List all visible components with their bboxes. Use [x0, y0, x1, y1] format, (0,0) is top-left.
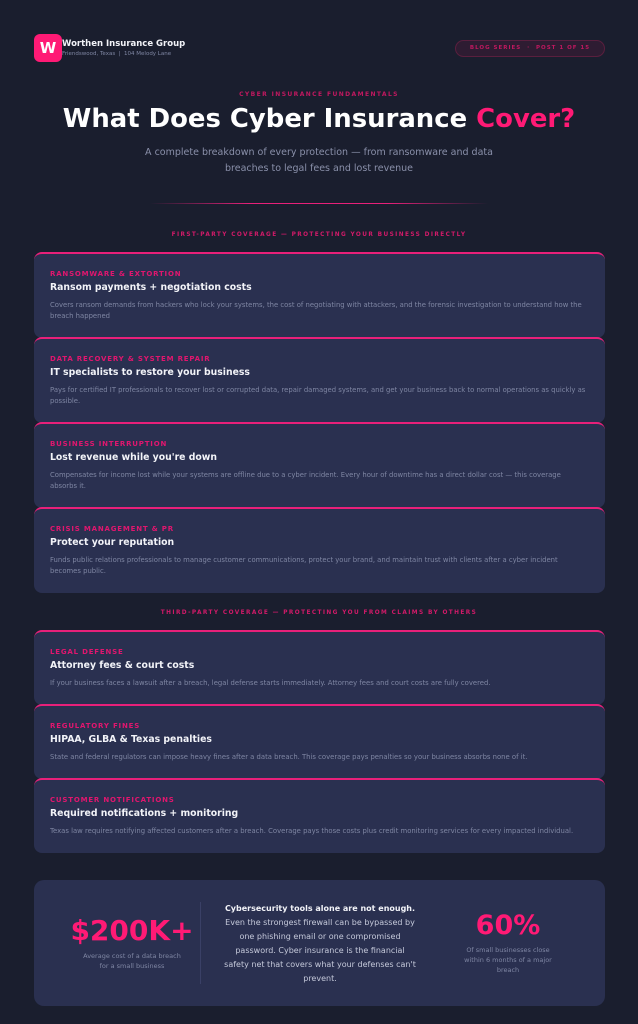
stat: 60%: Of small businesses close within 6 months of a major breach [464, 946, 552, 974]
card: data recovery: IT specialists to restore your business [50, 367, 250, 378]
card: crisis management: Funds public relations professionals to manage customer communications, protect your brand, and maintain trust with clients after a cyber incident becomes public. [50, 556, 558, 575]
card: ransomware: RANSOMWARE & EXTORTION [50, 270, 181, 278]
logo: W [40, 39, 56, 57]
title: What Does Cyber Insurance Cover? [63, 104, 575, 134]
logo [34, 34, 62, 62]
card: customer notifications: Texas law requires notifying affected customers after a breach. Coverage pays those costs plus credit monitoring services for every impacted individual. [50, 827, 573, 835]
card: regulatory fines: REGULATORY FINES [50, 722, 140, 730]
card: crisis management: Protect your reputation [50, 537, 174, 548]
card: crisis management [34, 507, 605, 593]
company name: Worthen Insurance Group [62, 39, 185, 49]
card: data recovery: Pays for certified IT professionals to recover lost or corrupted data, repair damaged systems, and get your business back to normal operations as quickly as possible. [50, 386, 585, 405]
stat: 200K: for a small business [100, 962, 164, 970]
card: regulatory fines [34, 704, 605, 779]
card: legal defense [34, 630, 605, 705]
message: Cybersecurity tools alone are not enough. [225, 904, 415, 913]
card: customer notifications [34, 778, 605, 853]
company name [62, 39, 185, 57]
card: ransomware [34, 252, 605, 338]
kicker: CYBER INSURANCE FUNDAMENTALS [239, 91, 399, 98]
card: data recovery [34, 337, 605, 423]
card: business interruption: Lost revenue while you're down [50, 452, 217, 463]
badge: BLOG SERIES · POST 1 OF 15 [470, 45, 590, 51]
message: Even the strongest firewall can be bypassed by one phishing email or one compromised password. Cyber insurance is the financial safety net that covers what your defenses can't prevent. [224, 918, 416, 983]
card: business interruption: Compensates for income lost while your systems are offline due to a cyber incident. Every hour of downtime has a direct dollar cost — this coverage absorbs it. [50, 471, 561, 490]
card: data recovery: DATA RECOVERY & SYSTEM REPAIR [50, 355, 210, 363]
section header: first-party: FIRST-PARTY COVERAGE — PROTECTING YOUR BUSINESS DIRECTLY [172, 232, 466, 238]
stat: 200K: Average cost of a data breach [83, 952, 181, 960]
stat: 200K [70, 914, 194, 970]
stat: 60%: 60% [476, 910, 540, 941]
stat: 60% [464, 910, 552, 974]
card: business interruption: BUSINESS INTERRUPTION [50, 440, 167, 448]
card: ransomware: Covers ransom demands from hackers who lock your systems, the cost of negotiating with attackers, and the forensic investigation to understand how the breach happened [50, 301, 582, 320]
card: regulatory fines: HIPAA, GLBA & Texas penalties [50, 734, 212, 745]
card: business interruption [34, 422, 605, 508]
company name: Friendswood, Texas | 104 Melody Lane [62, 51, 171, 57]
card: ransomware: Ransom payments + negotiation costs [50, 282, 252, 293]
card: customer notifications: CUSTOMER NOTIFICATIONS [50, 796, 175, 804]
card: legal defense: Attorney fees & court costs [50, 660, 194, 671]
card: legal defense: If your business faces a lawsuit after a breach, legal defense starts immediately. Attorney fees and court costs are fully covered. [50, 679, 491, 687]
badge [455, 40, 605, 57]
subtitle: A complete breakdown of every protection — from ransomware and data breaches to legal fees and lost revenue [145, 147, 493, 174]
card: customer notifications: Required notifications + monitoring [50, 808, 238, 819]
stat: 200K: $200K+ [70, 914, 194, 947]
card: legal defense: LEGAL DEFENSE [50, 648, 124, 656]
bottom panel [34, 880, 605, 1006]
card: regulatory fines: State and federal regulators can impose heavy fines after a data breach. This coverage pays penalties so your business absorbs none of it. [50, 753, 527, 761]
card: crisis management: CRISIS MANAGEMENT & PR [50, 525, 174, 533]
section header: third-party: THIRD-PARTY COVERAGE — PROTECTING YOU FROM CLAIMS BY OTHERS [161, 610, 477, 616]
